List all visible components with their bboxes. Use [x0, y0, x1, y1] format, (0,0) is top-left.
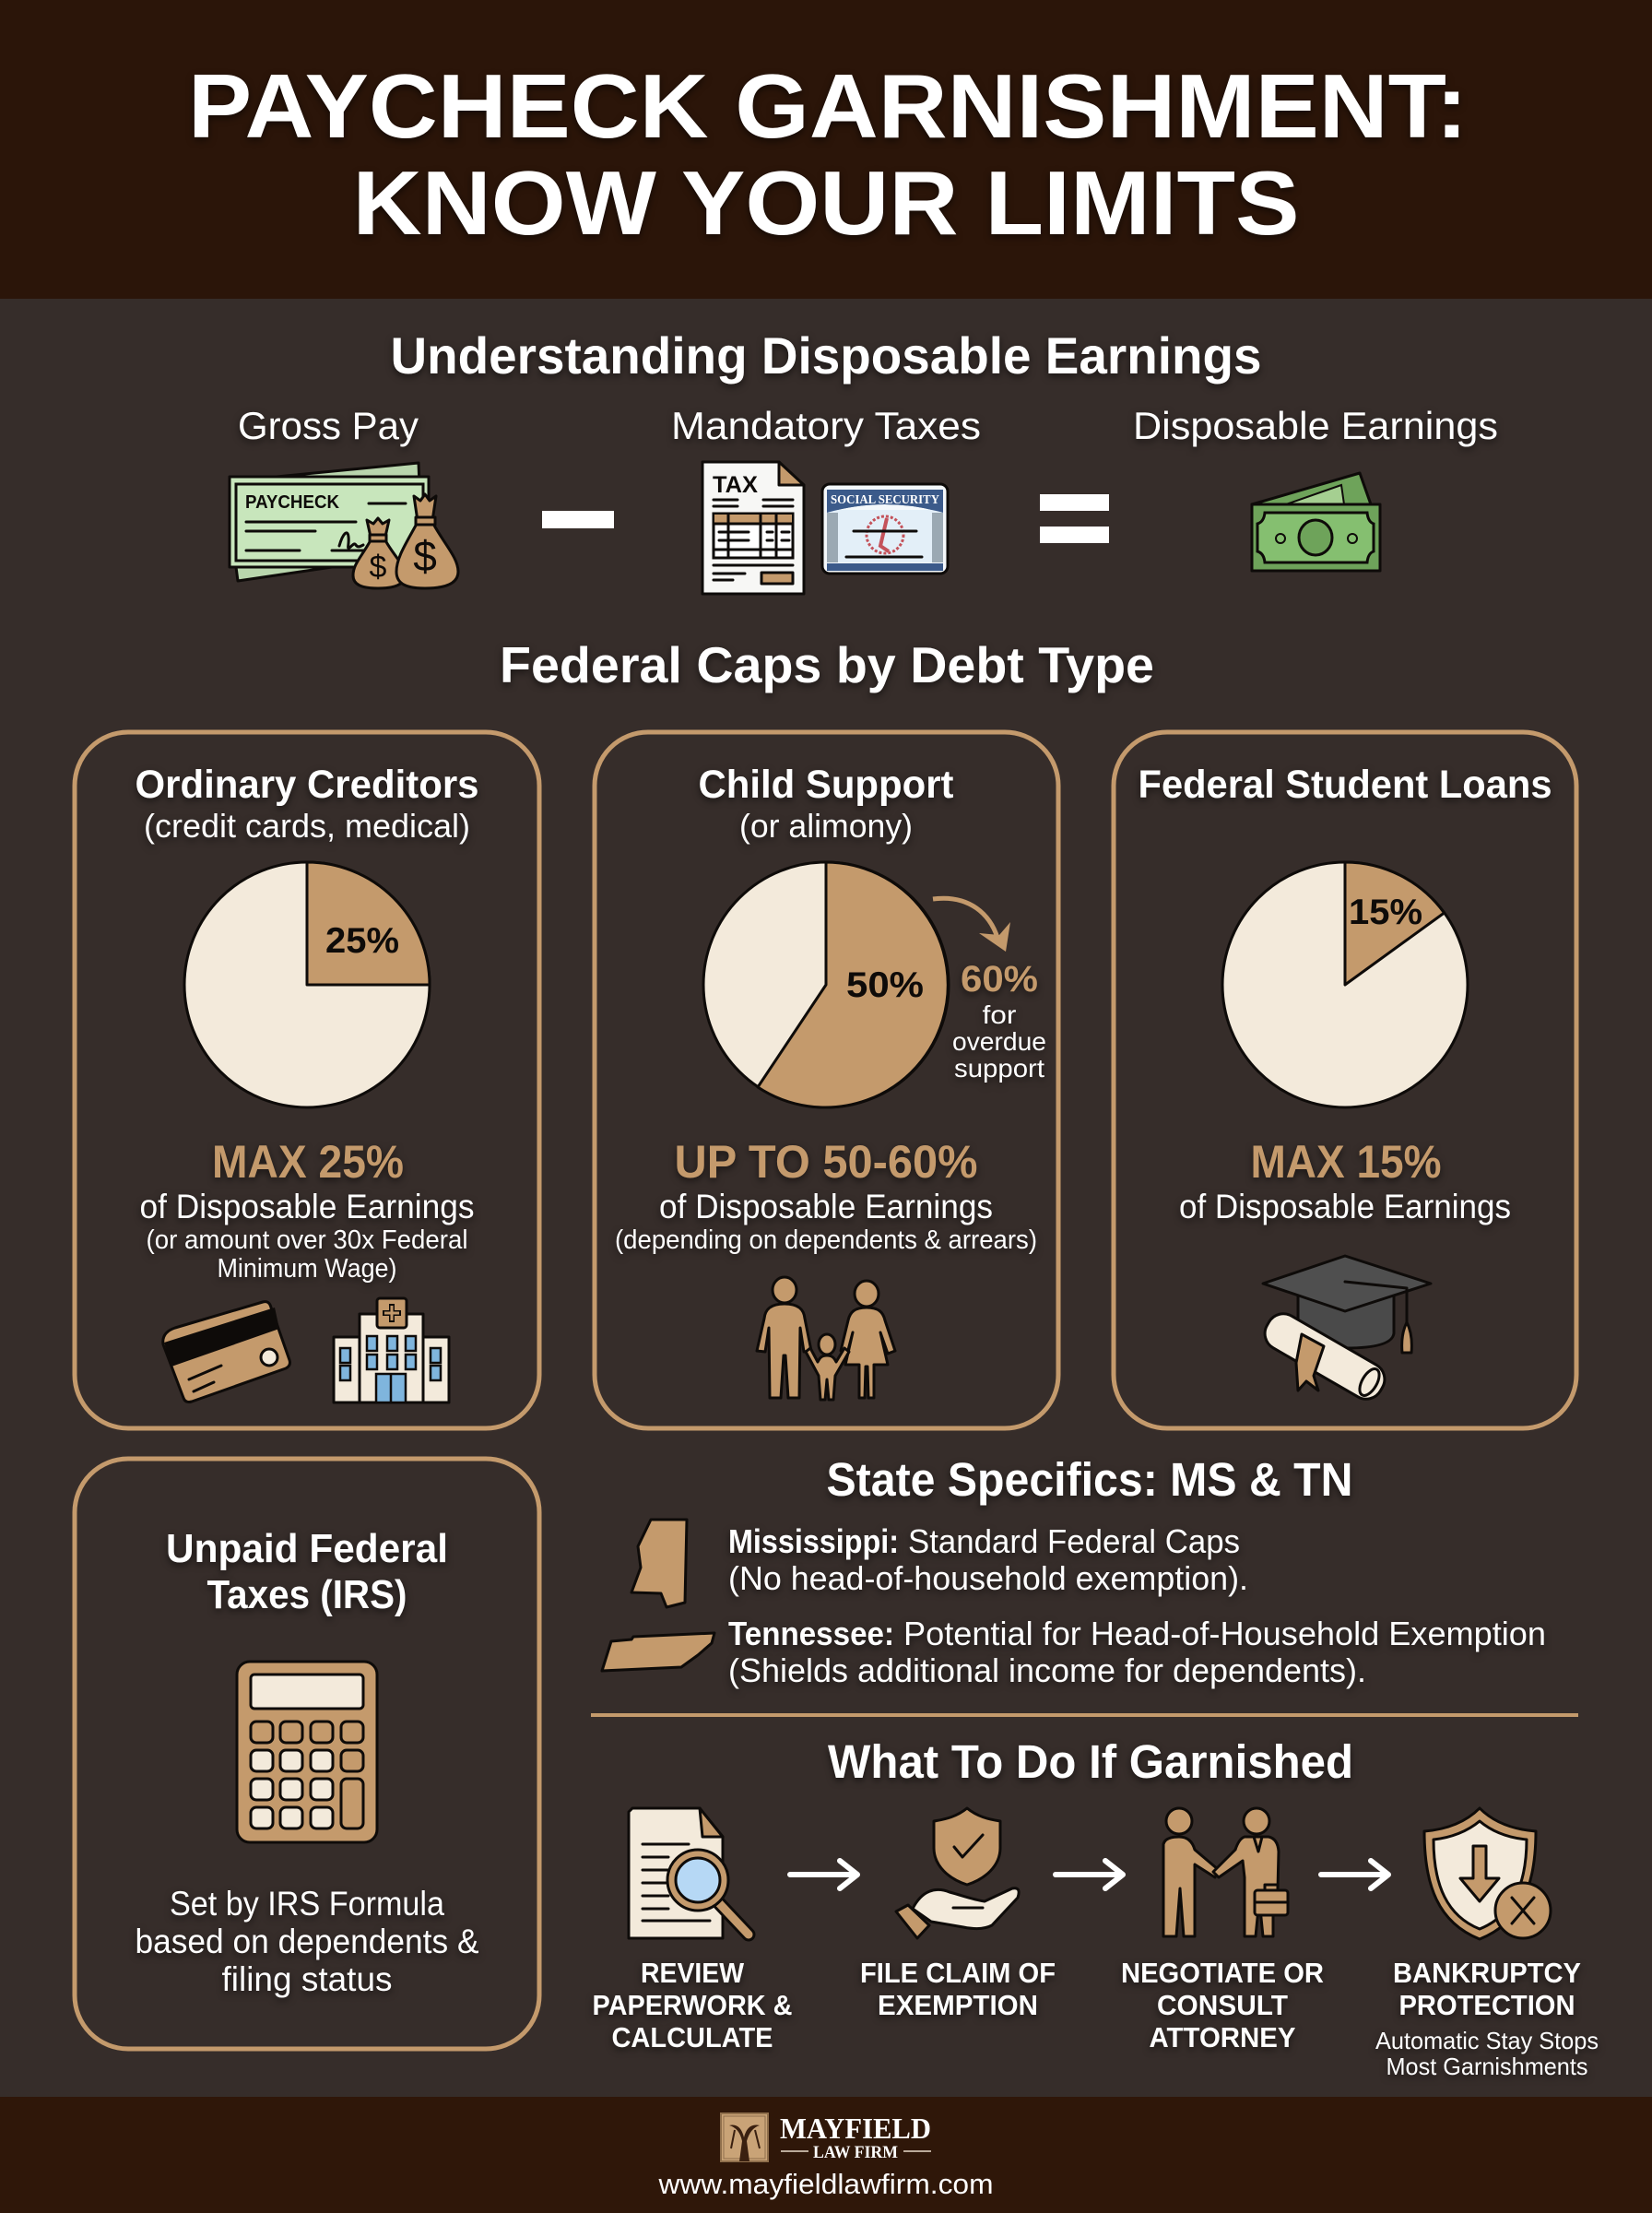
icon: review document with magnifier [629, 1808, 749, 1938]
step 1 label: CALCULATE [612, 2021, 773, 2053]
icon: paycheck and money bags: PAYCHECK [245, 492, 340, 513]
pie chart: 15%: 15% [1349, 893, 1422, 932]
icon: minus [542, 511, 614, 528]
icon: shield on hand [896, 1808, 1019, 1938]
description [140, 1188, 474, 1284]
callout: 60% overdue: 60% [961, 959, 1038, 1000]
icon: tax form: TAX [713, 472, 758, 498]
description: based on dependents & [135, 1923, 479, 1960]
step 4 label: BANKRUPTCY [1393, 1957, 1581, 1989]
heading: What To Do If Garnished [828, 1735, 1353, 1788]
text: mississippi: Standard Federal Caps [908, 1522, 1240, 1560]
step 2 label: EXEMPTION [878, 1989, 1038, 2021]
icon: paycheck and money bags [230, 463, 458, 588]
description: of Disposable Earnings [1179, 1188, 1511, 1225]
card title [166, 1526, 448, 1617]
label: gross pay: Gross Pay [238, 404, 419, 447]
callout: 60% overdue: overdue [952, 1027, 1046, 1056]
description: of Disposable Earnings [140, 1188, 474, 1225]
arrow: increase to 60% [933, 898, 1010, 952]
description: filing status [221, 1960, 393, 1998]
arrow [1056, 1861, 1123, 1888]
panel: child support [595, 732, 1058, 1428]
description [135, 1885, 479, 1998]
step 1 label: REVIEW [641, 1957, 745, 1989]
title: KNOW YOUR LIMITS [352, 152, 1300, 254]
icon: calculator [237, 1662, 377, 1842]
step 3 label: NEGOTIATE OR [1121, 1957, 1324, 1989]
label: disposable earnings: Disposable Earnings [1133, 404, 1498, 447]
icon: tennessee [602, 1633, 714, 1671]
description: (or amount over 30x Federal [146, 1225, 468, 1255]
section: understanding disposable earnings [230, 326, 1498, 594]
description [615, 1188, 1037, 1255]
icon: paycheck and money bags: $ [370, 550, 387, 585]
arrow [790, 1861, 857, 1888]
card title: Taxes (IRS) [206, 1572, 407, 1617]
title: PAYCHECK GARNISHMENT: [188, 55, 1468, 157]
text: mississippi: (No head-of-household exemption). [728, 1559, 1248, 1597]
card title: Unpaid Federal [166, 1526, 448, 1571]
step 2 label [860, 1957, 1056, 2021]
step 1 label: PAPERWORK & [592, 1989, 793, 2021]
description: of Disposable Earnings [659, 1188, 993, 1225]
heading: Understanding Disposable Earnings [391, 326, 1261, 385]
step 3 label [1121, 1957, 1324, 2053]
logo wordmark [780, 2112, 931, 2162]
description: Minimum Wage) [218, 1254, 396, 1284]
icon: bankruptcy shield [1424, 1808, 1551, 1939]
step 4 label: PROTECTION [1399, 1989, 1575, 2021]
section: what to do if garnished [592, 1735, 1599, 2080]
pie chart: 25%: 25% [325, 921, 399, 961]
pie chart: 50-60% [703, 862, 949, 1107]
card title: Federal Student Loans [1138, 763, 1552, 807]
logo mark [721, 2113, 768, 2161]
icon: credit card [163, 1302, 289, 1402]
card subtitle: (or alimony) [739, 807, 913, 845]
section: state specifics [602, 1453, 1546, 1689]
icon: family [757, 1277, 895, 1400]
step 3 label: ATTORNEY [1149, 2021, 1296, 2053]
step 3 label: CONSULT [1157, 1989, 1288, 2021]
step 4 label [1375, 1957, 1599, 2080]
icon: mississippi [631, 1520, 687, 1607]
icon: equals [1040, 494, 1109, 543]
icon: hospital [334, 1298, 449, 1402]
label: mandatory taxes: Mandatory Taxes [671, 404, 981, 447]
icon: tax form [702, 462, 804, 594]
step 2 label: FILE CLAIM OF [860, 1957, 1056, 1989]
icon: cash [1252, 473, 1380, 571]
panel: federal student loans [1114, 732, 1576, 1428]
heading: State Specifics: MS & TN [826, 1453, 1353, 1506]
stat: max 25%: MAX 25% [212, 1136, 404, 1188]
icon: social security card [822, 484, 948, 574]
text: mississippi: Mississippi: [728, 1522, 899, 1560]
icon: handshake [1163, 1808, 1288, 1936]
text: tennessee [728, 1615, 1546, 1689]
pie chart: 25% [184, 862, 430, 1107]
icon: paycheck and money bags: $ [413, 532, 437, 580]
card title: Ordinary Creditors [135, 763, 479, 807]
text: tennessee: Potential for Head-of-Household Exemption [903, 1615, 1546, 1652]
pie chart: 50-60%: 50% [846, 965, 924, 1005]
footer [0, 2097, 1652, 2213]
icon: graduation cap and diploma [1259, 1256, 1431, 1405]
website: www.mayfieldlawfirm.com [657, 2168, 994, 2200]
heading: federal caps: Federal Caps by Debt Type [500, 636, 1154, 693]
arrow [1321, 1861, 1388, 1888]
icon: social security card: SOCIAL SECURITY [831, 493, 939, 507]
callout: 60% overdue: support [954, 1054, 1044, 1083]
title [188, 55, 1468, 254]
card subtitle: (credit cards, medical) [144, 807, 470, 845]
logo wordmark: LAW FIRM [813, 2143, 898, 2162]
description: Set by IRS Formula [170, 1885, 444, 1923]
logo wordmark: MAYFIELD [780, 2112, 931, 2145]
panel: unpaid federal taxes [75, 1459, 539, 2049]
step 4 label: Automatic Stay Stops [1375, 2027, 1599, 2054]
text: tennessee: (Shields additional income for dependents). [728, 1651, 1366, 1689]
pie chart: 15% [1222, 862, 1468, 1107]
panel: ordinary creditors [75, 732, 539, 1428]
callout: 60% overdue [952, 959, 1046, 1083]
description: (depending on dependents & arrears) [615, 1225, 1037, 1255]
stat: max 15%: MAX 15% [1250, 1136, 1442, 1188]
card title: Child Support [699, 763, 953, 807]
header banner [0, 0, 1652, 299]
text: tennessee: Tennessee: [728, 1615, 894, 1652]
callout: 60% overdue: for [983, 1000, 1016, 1029]
step 1 label [592, 1957, 793, 2053]
stat: up to 50-60%: UP TO 50-60% [675, 1136, 977, 1188]
text: mississippi [728, 1522, 1248, 1597]
step 4 label: Most Garnishments [1386, 2053, 1587, 2080]
